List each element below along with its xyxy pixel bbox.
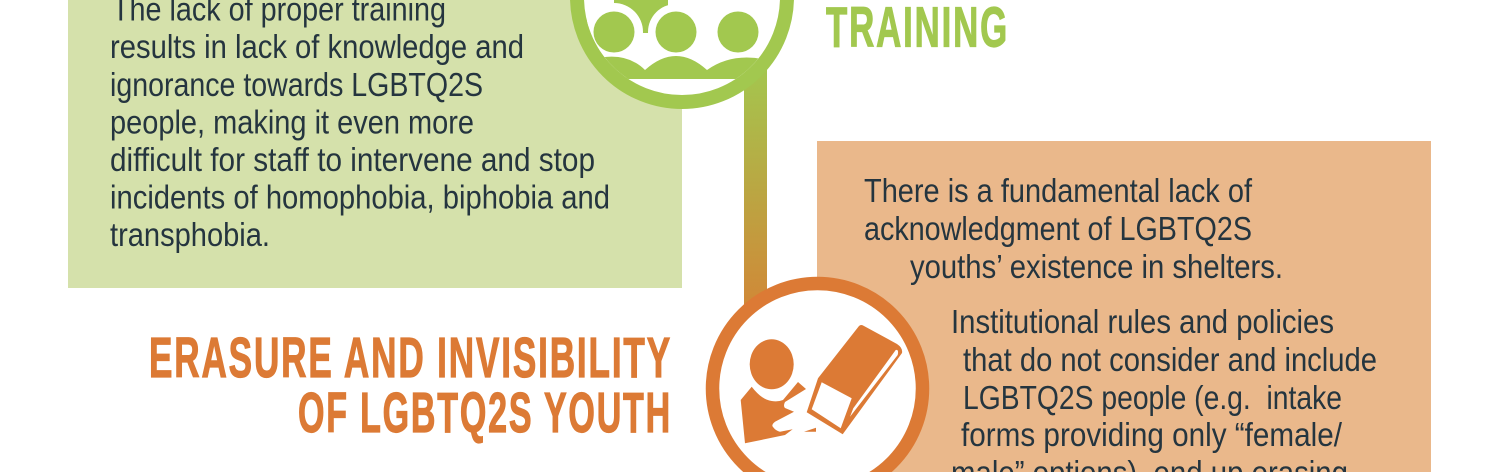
text block: erasure description: LGBTQ2S people (e.g. intake bbox=[963, 380, 1342, 417]
text block: erasure description: There is a fundamental lack of bbox=[864, 173, 1253, 210]
text block: lack of training description: ignorance towards LGBTQ2S bbox=[110, 67, 483, 104]
panel: lack of training bbox=[68, 0, 682, 288]
heading: erasure and invisibility bbox=[149, 326, 672, 445]
text block: erasure description: youths’ existence in shelters. bbox=[910, 249, 1283, 286]
text block: erasure description: Institutional rules and policies bbox=[951, 304, 1334, 341]
text block: lack of training description: difficult for staff to intervene and stop bbox=[110, 142, 595, 179]
connector line bbox=[744, 60, 767, 305]
icon: person and eraser bbox=[712, 284, 922, 472]
heading: erasure and invisibility: OF LGBTQ2S YOUTH bbox=[298, 381, 672, 445]
text block: lack of training description: incidents of homophobia, biphobia and bbox=[110, 180, 610, 216]
icon: training group bbox=[577, 0, 787, 102]
text block: lack of training description: transphobia. bbox=[110, 217, 270, 254]
text block: erasure description bbox=[864, 173, 1377, 472]
text block: lack of training description: results in lack of knowledge and bbox=[110, 29, 524, 66]
text block: erasure description: that do not consider and include bbox=[963, 342, 1377, 379]
heading: erasure and invisibility: ERASURE AND INVISIBILITY bbox=[149, 326, 672, 390]
panel: erasure and invisibility bbox=[817, 141, 1431, 472]
text block: erasure description: forms providing only “female/ bbox=[961, 417, 1343, 454]
text block: erasure description: acknowledgment of LGBTQ2S bbox=[864, 211, 1252, 248]
text block: lack of training description bbox=[110, 0, 610, 254]
text block: lack of training description: people, making it even more bbox=[110, 104, 474, 142]
